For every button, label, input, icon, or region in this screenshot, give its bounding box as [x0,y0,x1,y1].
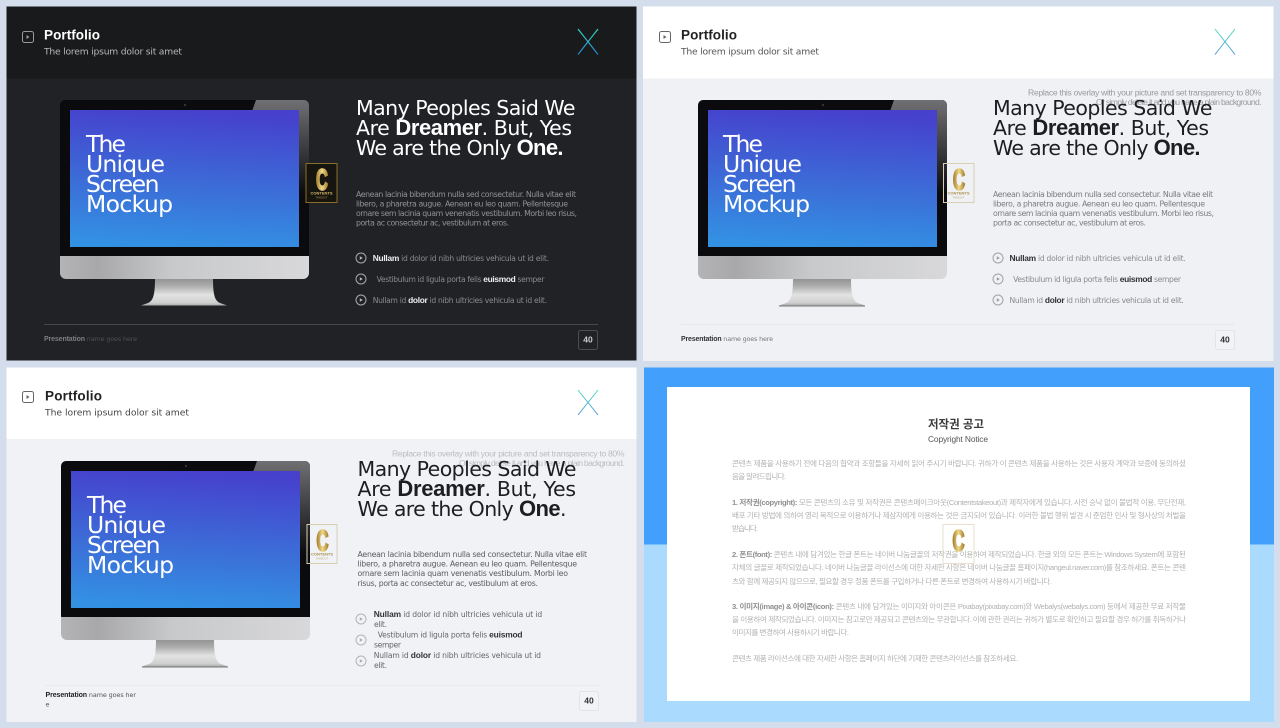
body paragraph: libero, a pharetra augue. Aenean eu leo quam. Pellentesque [993,200,1205,208]
bullet list: Nullam id dolor id nibh ultricies vehicula ut id elit. [373,253,549,263]
badge: gold C logo [943,524,974,564]
bullet list: Nullam id dolor id nibh ultricies vehicula ut id elit. [1010,253,1186,263]
monitor mockup [61,461,310,667]
badge: gold C logo [944,164,974,202]
body paragraph: porta ac consectetur ac, vestibulum at eros. [993,218,1146,228]
notice subtitle: Copyright Notice [928,434,988,444]
monitor mockup [698,100,947,306]
screen title: Screen [86,170,160,198]
bullet list: semper [374,640,402,650]
badge: gold C logo: TAKEOUT [952,196,965,200]
footer: Presentation name goes her [46,691,136,699]
footer [681,324,1234,350]
badge: gold C logo: C [316,525,329,557]
badge: gold C logo [306,164,337,202]
headline: We are the Only One. [993,135,1200,160]
notice body text: 을 이용하여 제작되었습니다. 이미지는 참고로만 제공되고 콘텐츠와는 무관합니다. 이에 관한 권리는 귀하가 별도로 확인하고 필요할 경우 허가를 취득하거나 [732,614,1186,624]
body paragraph: ornare sem lacinia quam venenatis vestibulum. Morbi leo risus, [356,209,577,218]
body paragraph: Aenean lacinia bibendum nulla sed consectetur. Nulla vitae elit [358,550,587,559]
headline: We are the Only One. [358,496,566,521]
panel: light portfolio slide [643,6,1274,361]
bullet list [356,609,542,670]
subheading: The lorem ipsum dolor sit amet [44,408,189,418]
screen title: Mockup [87,551,174,579]
notice body text [732,458,1186,663]
notice body text: 츠와 함께 제공되지 않으므로, 필요할 경우 정품 폰트를 구입하거나 다른 폰트로 변경하여 사용하시기 바랍니다. [732,576,1052,586]
slide body [6,6,636,360]
pale blue lower background [644,544,1274,722]
screen title: Unique [723,150,802,178]
notice body text: 콘텐츠 제품을 사용하기 전에 다음의 협약과 조항들을 자세히 읽어 주시기 바랍니다. 귀하가 이 콘텐츠 제품을 사용하는 것은 사용자 계약과 보증에 동의하셨 [732,458,1186,468]
subheading: The lorem ipsum dolor sit amet [680,46,819,58]
notice body text: 1. 저작권(copyright): 모든 콘텐츠의 소유 및 저작권은 콘텐츠메이크아웃(Contentstakeout)과 제작자에게 있습니다. 사전 승낙 없이 불법적 이용, 무단전재, [732,497,1186,507]
bullet list [993,253,1186,305]
screen title [722,130,810,218]
footer: 40 [584,696,594,706]
screen title [85,130,173,218]
footer: 40 [583,334,593,344]
notice body text: 콘텐츠 제품 라이선스에 대한 자세한 사항은 홈페이지 하단에 기재한 콘텐츠라이선스를 참조하세요. [732,653,1018,663]
header band [6,6,636,78]
badge: gold C logo: CONTENTS [311,552,333,556]
badge: gold C logo: CONTENTS [948,190,970,196]
headline: Many Peoples Said We [993,96,1212,120]
monitor mockup [60,100,309,306]
notice body text: 받습니다. [732,523,758,533]
headline: Many Peoples Said We [358,457,576,481]
footer: 40 [1220,334,1230,344]
headline: We are the Only One. [356,135,564,160]
bullet list: Nullam id dolor id nibh ultricies vehicula ut id [374,609,542,619]
headline: Are Dreamer. But, Yes [356,115,572,140]
notice body text: 자체의 글꼴로 제작되었습니다. 네이버 나눔글꼴 라이선스에 대한 자세한 사항은 네이버 나눔글꼴 홈페이지(hangeul.naver.com)를 참조하세요. 폰트는 콘텐 [732,562,1186,572]
footer: Presentation name goes here [44,335,137,343]
footer [45,686,600,710]
bullet list: elit. [374,620,387,629]
screen title [86,491,174,579]
subheading: The lorem ipsum dolor sit amet [43,46,182,58]
panel: copyright notice slide [644,368,1274,722]
heading: Portfolio: Portfolio [44,28,100,42]
badge: gold C logo: TAKEOUT [315,196,328,200]
bullet list: Vestibulum id ligula porta felis euismod [376,630,522,640]
badge: gold C logo: TAKEOUT [316,556,328,560]
overlay note: Replace this overlay with your picture and set transparency to 80% [1028,88,1262,98]
screen title: The [85,130,126,158]
bullet list: elit. [374,661,387,670]
icon: play square [22,392,34,402]
badge: gold C logo: CONTENTS [310,190,333,196]
headline: Are Dreamer. But, Yes [358,476,576,501]
overlay note [392,449,625,468]
screen title: Unique [87,511,166,539]
footer: Presentation name goes here [681,335,773,343]
body paragraph [358,550,587,588]
slide body [6,368,636,722]
bullet list [356,253,549,305]
headline [358,457,576,521]
body paragraph: porta ac consectetur ac, vestibulum at eros. [356,218,509,228]
notice body text: 음을 알려드립니다. [732,471,786,481]
icon: play square [22,32,34,42]
screen title: Mockup [86,190,173,218]
headline [993,96,1212,160]
bullet list: Nullam id dolor id nibh ultricies vehicula ut id elit. [373,295,547,305]
icon: X logo [578,29,598,54]
headline: Are Dreamer. But, Yes [993,115,1209,140]
screen title: Screen [723,170,796,198]
bullet list: Vestibulum id ligula porta felis euismod semper [1011,274,1182,284]
screen title: Unique [86,150,165,178]
badge: gold C logo: C [952,525,965,557]
white notice card [667,387,1250,701]
headline [356,96,576,160]
screen title: The [722,130,763,158]
blue upper background [644,368,1274,544]
panel: dark portfolio slide [6,6,636,360]
bullet list: Nullam id dolor id nibh ultricies vehicula ut id elit. [1010,295,1184,305]
bullet list: Nullam id dolor id nibh ultricies vehicula ut id [374,650,541,660]
overlay note: Or simply delete it and you have a plain background. [1096,97,1262,107]
body paragraph: risus, porta ac consectetur ac, vestibulum at eros. [358,579,538,588]
headline: Many Peoples Said We [356,96,576,120]
footer: e [46,700,50,708]
header band [6,368,636,439]
body paragraph [356,190,577,228]
notice body text: 배포 기타 방법에 의하여 영리 목적으로 이용하거나 제삼자에게 이용하는 것은 금지되어 있습니다. 이러한 불법 행위 발견 시 준엄한 민사 및 형사상의 처벌을 [732,510,1186,520]
body paragraph: libero, a pharetra augue. Aenean eu leo quam. Pellentesque [356,200,568,208]
screen title: The [86,491,127,519]
badge: gold C logo [307,524,337,564]
icon: play square [660,32,670,42]
overlay note [1028,88,1262,107]
screen title: Screen [87,531,160,559]
header band [643,6,1274,78]
overlay note: Or simply delete it and you have a plain background. [459,458,624,468]
icon: X logo [1215,29,1235,54]
notice body text: 이미지를 변경하여 사용하시기 바랍니다. [732,627,849,637]
bullet list: Vestibulum id ligula porta felis euismod semper [374,274,545,284]
badge: gold C logo: C [953,164,965,196]
body paragraph: libero, a pharetra augue. Aenean eu leo quam. Pellentesque [358,560,577,568]
body paragraph: ornare sem lacinia quam venenatis vestibulum. Morbi leo [358,569,568,578]
notice body text: 2. 폰트(font): 콘텐츠 내에 담겨있는 한글 폰트는 네이버 나눔글꼴의 저작권을 이용하여 제작되었습니다. 한글 외의 모든 폰트는 Windows System에 포함된 [732,549,1186,559]
heading: Portfolio: Portfolio [45,388,102,404]
notice title: 저작권 공고 [928,417,984,431]
screen title: Mockup [723,190,810,218]
body paragraph: Aenean lacinia bibendum nulla sed consectetur. Nulla vitae elit [993,190,1213,199]
icon: X logo [578,390,598,415]
body paragraph: ornare sem lacinia quam venenatis vestibulum. Morbi leo risus, [993,209,1214,218]
footer [44,324,598,350]
body paragraph: Aenean lacinia bibendum nulla sed consectetur. Nulla vitae elit [356,190,576,199]
badge: gold C logo: C [316,164,328,196]
notice body text: 3. 이미지(image) & 아이콘(icon): 콘텐츠 내에 담겨있는 이미지와 아이콘은 Pixabay(pixabay.com)와 Webalys(webalys.com) 등에서 제공한 무료 저작물 [732,601,1186,611]
panel: wrapped-text portfolio slide [6,368,636,722]
slide body [643,6,1274,361]
heading: Portfolio: Portfolio [681,28,737,42]
body paragraph [993,190,1214,228]
overlay note: Replace this overlay with your picture and set transparency to 80% [392,449,625,459]
